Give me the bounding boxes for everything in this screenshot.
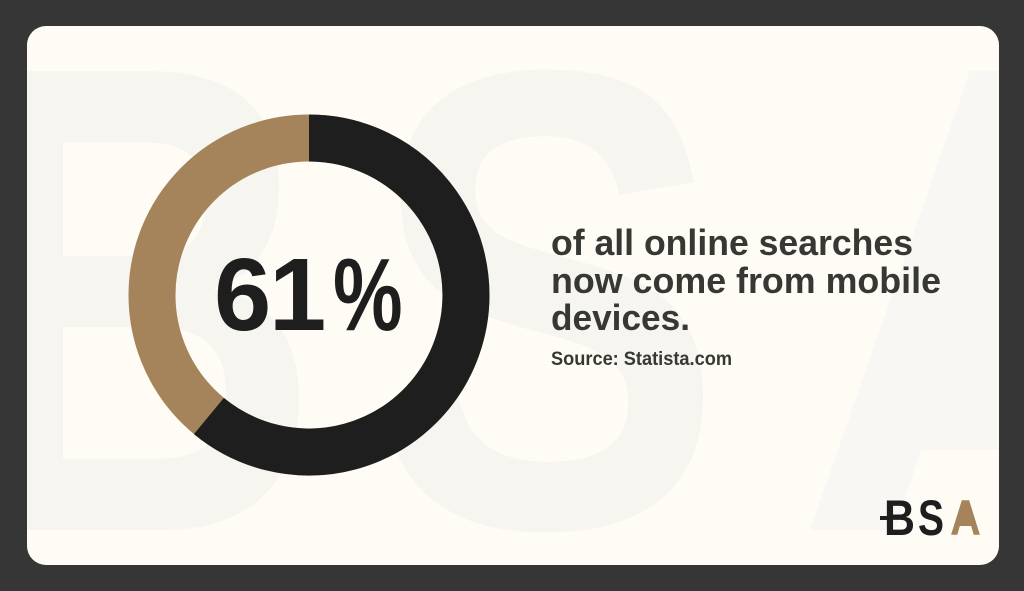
logo: BSA: A — [950, 490, 981, 546]
donut chart: 61% — [152, 138, 466, 452]
logo: BSA — [880, 490, 981, 546]
donut segment: remaining 39% — [152, 138, 466, 452]
statement text: now come from mobile — [551, 260, 941, 301]
statement text: devices. — [551, 297, 690, 338]
value: 61%: % — [333, 238, 403, 353]
logo: BSA: S — [918, 490, 944, 546]
value: 61%: 61 — [214, 237, 326, 352]
statement text: of all online searches — [551, 222, 913, 263]
value: 61% — [214, 237, 403, 353]
donut segment: 61% — [209, 138, 466, 452]
statement text — [551, 222, 941, 338]
source: Source: Statista.com — [551, 349, 732, 370]
logo: BSA: B — [884, 490, 915, 546]
